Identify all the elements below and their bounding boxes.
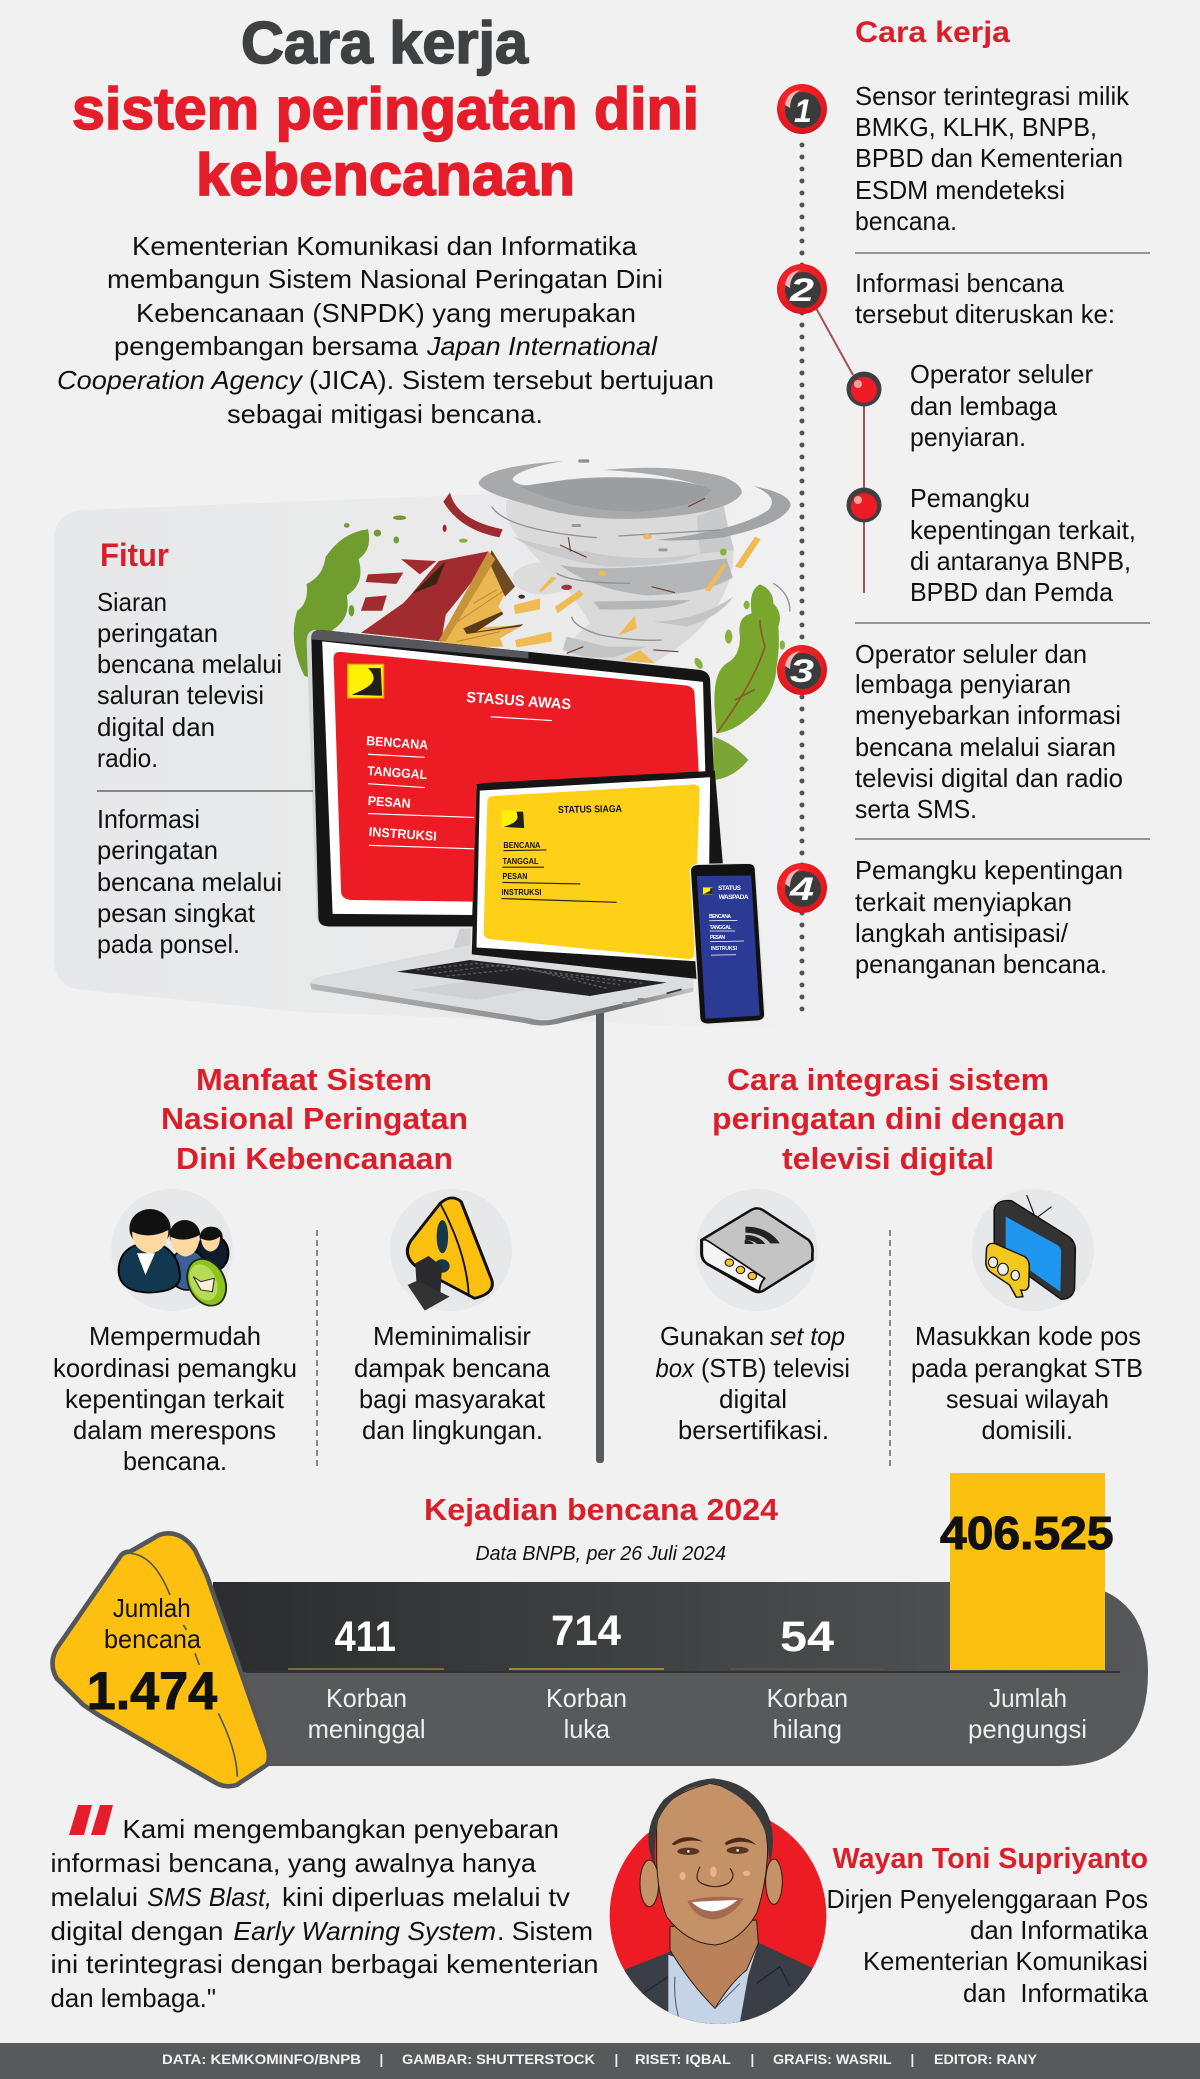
intro paragraph: pengembangan bersama bbox=[114, 331, 419, 361]
dotted timeline bbox=[800, 145, 804, 1020]
step 3: lembaga penyiaran bbox=[855, 669, 1071, 699]
step 3: 3 bbox=[790, 653, 814, 689]
divider dashed bbox=[889, 1230, 891, 1467]
speaker name and role bbox=[826, 1843, 1149, 2008]
fitur text bbox=[97, 537, 313, 959]
vertical connector bar bbox=[596, 1005, 604, 1463]
quote: dan lembaga." bbox=[50, 1983, 216, 2013]
heading: kejadian bencana bbox=[424, 1492, 779, 1565]
footer credits: GRAFIS: WASRIL bbox=[773, 2052, 892, 2067]
text: mempermudah: koordinasi pemangku bbox=[53, 1353, 297, 1383]
intro paragraph: (JICA). Sistem tersebut bertujuan bbox=[309, 365, 714, 395]
heading: cara kerja: Cara kerja bbox=[855, 16, 1010, 49]
step 4: terkait menyiapkan bbox=[855, 887, 1072, 917]
phone screen labels: TANGGAL bbox=[710, 925, 732, 931]
sub-step: operator: Operator seluler bbox=[910, 359, 1093, 389]
heading: manfaat bbox=[161, 1062, 468, 1176]
fitur text: pada ponsel. bbox=[97, 929, 240, 959]
text: mempermudah bbox=[53, 1321, 297, 1476]
stat: 714 korban luka: Korban bbox=[546, 1683, 627, 1713]
speaker name and role: Kementerian Komunikasi bbox=[863, 1946, 1148, 1976]
callout: jumlah bencana: bencana bbox=[104, 1624, 202, 1654]
sub-step: pemangku: kepentingan terkait, bbox=[910, 515, 1136, 545]
text: mempermudah: kepentingan terkait bbox=[65, 1384, 285, 1414]
text: gunakan set top box: Gunakan bbox=[660, 1321, 764, 1351]
footer credits: DATA: KEMKOMINFO/BNPB bbox=[162, 2052, 361, 2067]
text: gunakan set top box: (STB) televisi bbox=[701, 1353, 850, 1383]
laptop screen labels: BENCANA bbox=[503, 840, 540, 850]
text: meminimalisir: dampak bencana bbox=[354, 1353, 551, 1383]
fitur text: Fitur bbox=[100, 537, 169, 573]
icon: quote mark bbox=[69, 1805, 113, 1835]
callout: jumlah bencana: Jumlah bbox=[113, 1593, 191, 1623]
monitor screen labels: STASUS AWAS bbox=[466, 689, 572, 713]
fitur text: Siaran bbox=[97, 587, 167, 617]
step 3: menyebarkan informasi bbox=[855, 700, 1121, 730]
quote: informasi bencana, yang awalnya hanya bbox=[50, 1848, 537, 1878]
heading: manfaat: Manfaat Sistem bbox=[196, 1062, 432, 1097]
stat: 406.525 jumlah pengungsi: Jumlah bbox=[989, 1683, 1067, 1713]
monitor screen labels: BENCANA bbox=[366, 733, 429, 752]
title: Cara kerja bbox=[241, 10, 529, 76]
speaker name and role: dan Informatika bbox=[963, 1978, 1149, 2008]
intro paragraph: Cooperation Agency bbox=[57, 365, 304, 395]
text: gunakan set top box: bersertifikasi. bbox=[678, 1415, 829, 1445]
step 2: 2 bbox=[789, 272, 814, 308]
intro paragraph: sebagai mitigasi bencana. bbox=[227, 399, 543, 429]
fitur text: digital dan bbox=[97, 712, 215, 742]
stat: 411 korban meninggal: 411 bbox=[334, 1613, 396, 1661]
panel: fitur bbox=[54, 490, 795, 1030]
stat: 714 korban luka: 714 bbox=[551, 1607, 621, 1655]
step 4: 4 bbox=[789, 871, 814, 907]
quote: SMS Blast, bbox=[147, 1882, 272, 1912]
stat: 54 korban hilang bbox=[730, 1613, 884, 1744]
quote: ini terintegrasi dengan berbagai kementerian bbox=[50, 1949, 598, 1979]
text: meminimalisir: dan lingkungan. bbox=[362, 1415, 543, 1445]
portrait: wayan toni supriyanto bbox=[610, 1778, 826, 2037]
laptop screen labels: INSTRUKSI bbox=[502, 887, 542, 897]
step 3: bencana melalui siaran bbox=[855, 732, 1116, 762]
text: mempermudah: Mempermudah bbox=[89, 1321, 261, 1351]
step 1: BMKG, KLHK, BNPB, bbox=[855, 112, 1097, 142]
laptop base bbox=[310, 928, 693, 1026]
intro paragraph: Japan International bbox=[426, 331, 658, 361]
sub-step: operator: dan lembaga bbox=[910, 391, 1058, 421]
stats band bbox=[213, 1582, 1148, 1766]
intro paragraph: membangun Sistem Nasional Peringatan Dini bbox=[107, 264, 663, 294]
laptop screen labels: PESAN bbox=[502, 871, 528, 881]
stat: 406.525 jumlah pengungsi: pengungsi bbox=[968, 1714, 1087, 1744]
quote: Kami mengembangkan penyebaran bbox=[122, 1814, 559, 1844]
text: masukkan kode pos: domisili. bbox=[982, 1415, 1073, 1445]
quote bbox=[50, 1814, 598, 2013]
footer credits: RISET: IQBAL bbox=[635, 2052, 731, 2067]
footer credits: | bbox=[750, 2052, 754, 2067]
icon: people with check badge bbox=[111, 1189, 233, 1311]
fitur text: peringatan bbox=[97, 835, 218, 865]
stat: 54 korban hilang: 54 bbox=[780, 1613, 834, 1661]
title bbox=[72, 10, 699, 208]
step 1: bencana. bbox=[855, 206, 957, 236]
step 1: Sensor terintegrasi milik bbox=[855, 81, 1130, 111]
speaker name and role: Wayan Toni Supriyanto bbox=[833, 1843, 1148, 1875]
phone screen labels: INSTRUKSI bbox=[711, 946, 738, 952]
text: masukkan kode pos: sesuai wilayah bbox=[946, 1384, 1109, 1414]
step 3: Operator seluler dan bbox=[855, 639, 1087, 669]
text: gunakan set top box: box bbox=[656, 1353, 695, 1383]
heading: cara integrasi: Cara integrasi sistem bbox=[727, 1062, 1049, 1097]
monitor bbox=[307, 630, 714, 926]
phone screen labels: BENCANA bbox=[709, 914, 731, 920]
step 4: penanganan bencana. bbox=[855, 949, 1107, 979]
step 3: serta SMS. bbox=[855, 794, 977, 824]
quote: melalui bbox=[50, 1882, 138, 1912]
phone screen labels bbox=[709, 885, 749, 952]
icon: warning sign bbox=[390, 1189, 512, 1311]
stat: 54 korban hilang: hilang bbox=[772, 1714, 842, 1744]
quote: . Sistem bbox=[497, 1916, 593, 1946]
heading: cara integrasi bbox=[712, 1062, 1065, 1176]
text: mempermudah: dalam merespons bbox=[73, 1415, 276, 1445]
title: sistem peringatan dini bbox=[72, 76, 699, 142]
step 2: tersebut diteruskan ke: bbox=[855, 299, 1115, 329]
phone screen labels: WASPADA bbox=[719, 894, 749, 901]
footer credits: | bbox=[910, 2052, 914, 2067]
callout: jumlah bencana bbox=[52, 1533, 269, 1786]
heading: cara integrasi: televisi digital bbox=[782, 1141, 994, 1176]
bar: jumlah pengungsi bbox=[950, 1473, 1105, 1670]
sub-step connector bbox=[816, 308, 864, 593]
step 3 bbox=[777, 639, 1123, 824]
sub-step: operator: penyiaran. bbox=[910, 422, 1026, 452]
text: mempermudah: bencana. bbox=[123, 1446, 227, 1476]
step 4: Pemangku kepentingan bbox=[855, 855, 1123, 885]
sub-step: pemangku: di antaranya BNPB, bbox=[910, 546, 1131, 576]
step 3: televisi digital dan radio bbox=[855, 763, 1123, 793]
fitur text: radio. bbox=[97, 743, 158, 773]
text: gunakan set top box: set top bbox=[770, 1321, 845, 1351]
laptop screen labels: STATUS SIAGA bbox=[558, 804, 622, 816]
stat: 714 korban luka: luka bbox=[564, 1714, 611, 1744]
footer credits: GAMBAR: SHUTTERSTOCK bbox=[402, 2052, 595, 2067]
tornado bbox=[443, 459, 791, 670]
step 1 bbox=[777, 81, 1130, 236]
text: gunakan set top box bbox=[656, 1321, 850, 1445]
sub-step: pemangku: Pemangku bbox=[910, 483, 1030, 513]
sub-step: operator bbox=[846, 359, 1093, 452]
laptop screen labels bbox=[502, 804, 622, 897]
heading: manfaat: Nasional Peringatan bbox=[161, 1101, 468, 1136]
stat: 714 korban luka bbox=[509, 1607, 664, 1744]
heading: kejadian bencana: Kejadian bencana 2024 bbox=[424, 1492, 779, 1527]
intro paragraph bbox=[57, 231, 714, 429]
stat: 54 korban hilang: Korban bbox=[767, 1683, 848, 1713]
stat: 406.525 jumlah pengungsi bbox=[940, 1507, 1114, 1744]
quote: digital dengan bbox=[50, 1916, 224, 1946]
text: meminimalisir: Meminimalisir bbox=[373, 1321, 531, 1351]
footer credits bbox=[0, 2043, 1200, 2079]
tree left bbox=[294, 529, 369, 680]
footer credits: | bbox=[380, 2052, 383, 2067]
title: kebencanaan bbox=[196, 142, 575, 208]
step 1: ESDM mendeteksi bbox=[855, 175, 1065, 205]
heading: kejadian bencana: Data BNPB, per 26 Juli 2024 bbox=[476, 1543, 726, 1565]
heading: cara integrasi: peringatan dini dengan bbox=[712, 1101, 1065, 1136]
stat: 406.525 jumlah pengungsi: 406.525 bbox=[940, 1507, 1114, 1559]
quote: Early Warning System bbox=[233, 1916, 496, 1946]
fitur text: bencana melalui bbox=[97, 649, 282, 679]
icon: set top box bbox=[696, 1189, 818, 1311]
monitor screen labels: INSTRUKSI bbox=[368, 824, 437, 844]
sub-step: pemangku bbox=[846, 483, 1136, 607]
step 4 bbox=[777, 855, 1123, 979]
step 4: langkah antisipasi/ bbox=[855, 918, 1069, 948]
footer credits: | bbox=[614, 2052, 618, 2067]
fitur text: peringatan bbox=[97, 618, 218, 648]
step 1: BPBD dan Kementerian bbox=[855, 143, 1123, 173]
phone screen labels: PESAN bbox=[710, 935, 725, 941]
stat: 411 korban meninggal: meninggal bbox=[308, 1714, 426, 1744]
fitur text: Informasi bbox=[97, 804, 200, 834]
text: meminimalisir: bagi masyarakat bbox=[359, 1384, 546, 1414]
stat: 411 korban meninggal: Korban bbox=[326, 1683, 407, 1713]
text: meminimalisir bbox=[354, 1321, 551, 1445]
laptop screen labels: TANGGAL bbox=[502, 856, 538, 866]
text: masukkan kode pos bbox=[911, 1321, 1143, 1445]
fitur text: saluran televisi bbox=[97, 680, 264, 710]
phone screen labels: STATUS bbox=[718, 885, 742, 892]
monitor screen labels bbox=[366, 689, 572, 844]
step 1: 1 bbox=[794, 93, 812, 129]
speaker name and role: Dirjen Penyelenggaraan Pos bbox=[826, 1884, 1148, 1914]
phone bbox=[690, 863, 765, 1024]
stat: 411 korban meninggal bbox=[288, 1613, 444, 1744]
fitur text: bencana melalui bbox=[97, 867, 282, 897]
house roof bbox=[440, 550, 523, 647]
footer credits: EDITOR: RANY bbox=[934, 2052, 1037, 2067]
divider dashed bbox=[316, 1230, 318, 1467]
monitor screen labels: PESAN bbox=[367, 793, 411, 811]
fitur text: pesan singkat bbox=[97, 898, 256, 928]
sub-step: pemangku: BPBD dan Pemda bbox=[910, 577, 1114, 607]
intro paragraph: Kementerian Komunikasi dan Informatika bbox=[132, 231, 638, 261]
intro paragraph: Kebencanaan (SNPDK) yang merupakan bbox=[136, 298, 636, 328]
laptop screen bbox=[472, 771, 723, 979]
step 2: Informasi bencana bbox=[855, 268, 1065, 298]
text: masukkan kode pos: Masukkan kode pos bbox=[915, 1321, 1141, 1351]
speaker name and role: dan Informatika bbox=[970, 1915, 1149, 1945]
monitor screen labels: TANGGAL bbox=[367, 763, 428, 782]
heading: manfaat: Dini Kebencanaan bbox=[176, 1141, 453, 1176]
text: masukkan kode pos: pada perangkat STB bbox=[911, 1353, 1143, 1383]
quote: kini diperluas melalui tv bbox=[282, 1882, 570, 1912]
text: gunakan set top box: digital bbox=[719, 1384, 787, 1414]
illustration: tornado, house, devices bbox=[294, 459, 791, 1026]
step 2 bbox=[777, 264, 1115, 329]
callout: jumlah bencana: 1.474 bbox=[87, 1662, 218, 1721]
tree right bbox=[713, 584, 780, 780]
icon: tv with chat bubble bbox=[972, 1189, 1094, 1311]
